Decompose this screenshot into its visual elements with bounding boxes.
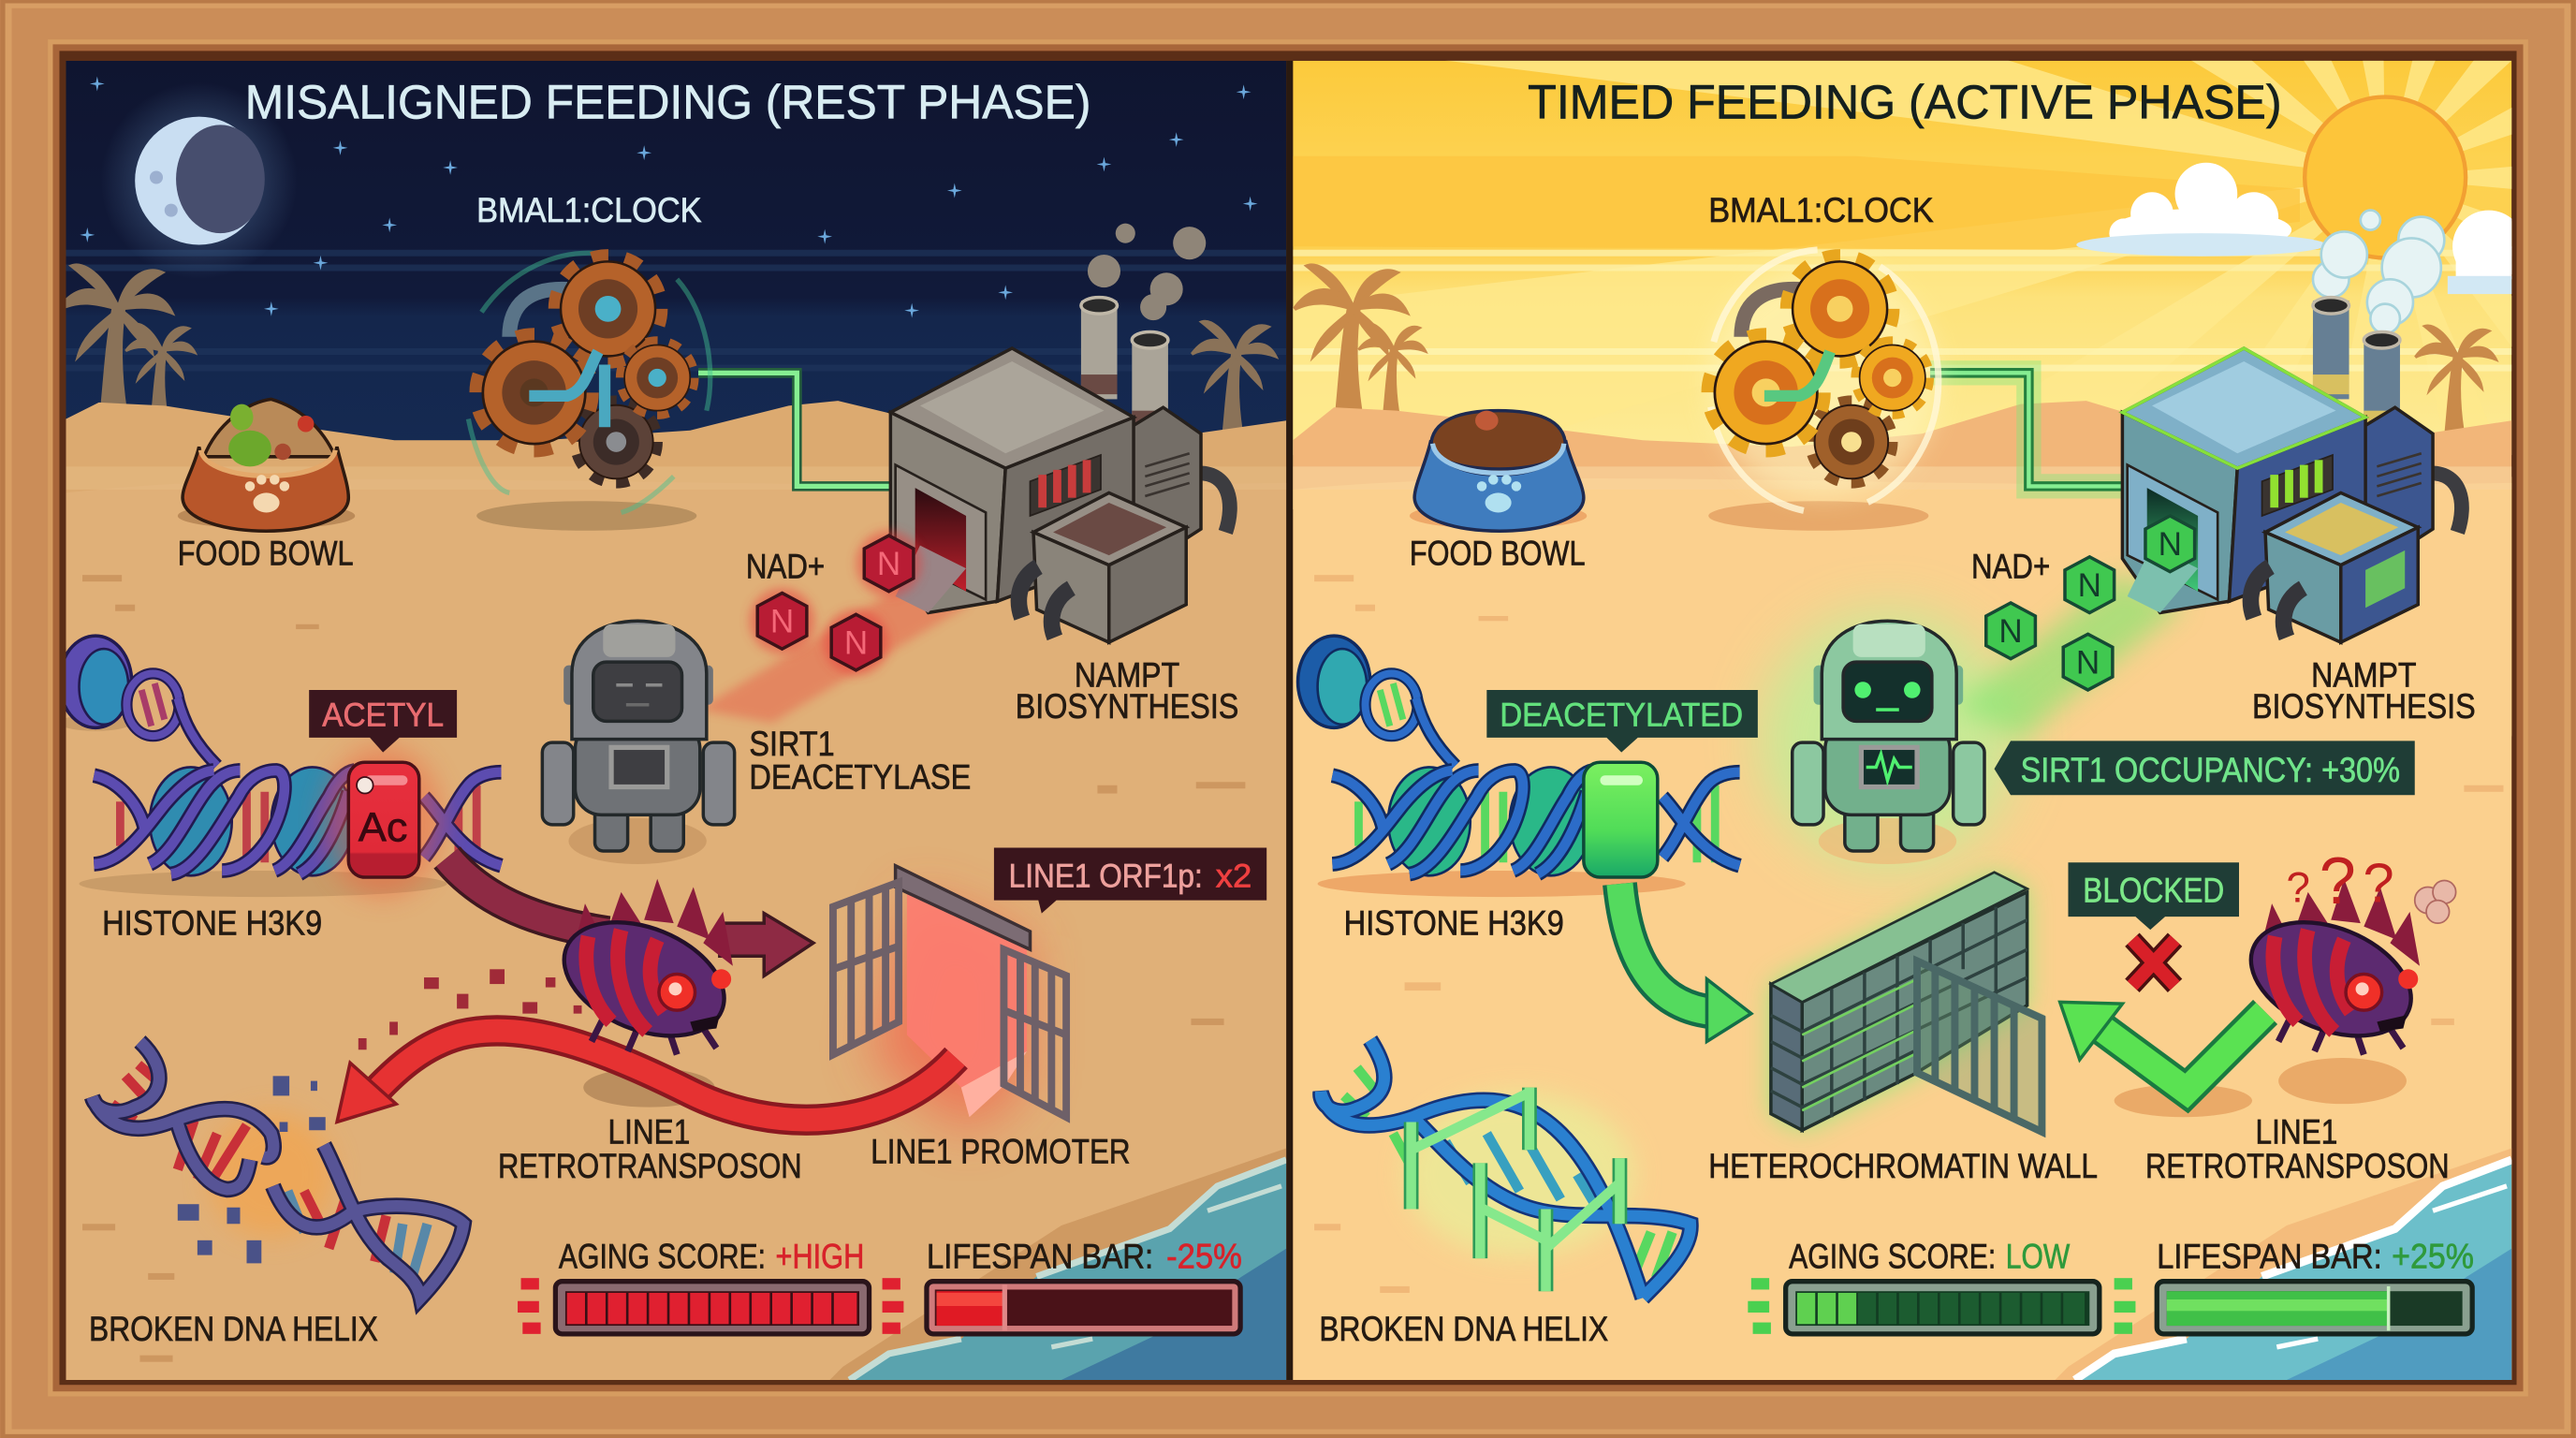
label: NAMPT biosynthesis left: BIOSYNTHESIS bbox=[1016, 687, 1238, 726]
tag: SIRT1 occupancy bbox=[1995, 741, 2415, 795]
tag: BLOCKED: BLOCKED bbox=[2083, 871, 2224, 909]
label: aging score low: AGING SCORE: bbox=[1789, 1238, 1996, 1276]
icon: NAD+ coins, green: N bbox=[2078, 567, 2101, 604]
icon: NAD+ coins, green: N bbox=[2159, 526, 2182, 563]
sea bbox=[829, 1149, 1286, 1380]
gauge: aging score, left bbox=[518, 1278, 903, 1334]
icon: NAMPT factory, blue and green bbox=[2122, 298, 2462, 642]
label: aging score low: LOW bbox=[2006, 1238, 2070, 1276]
label: histone right: HISTONE H3K9 bbox=[1344, 903, 1564, 942]
title: timed feeding: TIMED FEEDING (ACTIVE PHASE) bbox=[1528, 75, 2282, 128]
icon: LINE1 retrotransposon bug, blocked bbox=[2234, 879, 2428, 1058]
arrow: histone to wall bbox=[1619, 884, 1751, 1041]
label: LINE1 retrotransposon right bbox=[2145, 1112, 2450, 1185]
label: NAMPT biosynthesis right bbox=[2252, 655, 2476, 726]
label: lifespan +25%: +25% bbox=[2392, 1238, 2474, 1276]
arrow: LINE1 deflected bbox=[2060, 1002, 2265, 1091]
panel: misaligned feeding (rest phase) bbox=[59, 61, 1286, 1380]
icon: LINE1 promoter open gate bbox=[833, 866, 1066, 1134]
label: lifespan -25%: LIFESPAN BAR: bbox=[927, 1238, 1153, 1276]
clouds bbox=[2076, 163, 2525, 294]
question marks: ? bbox=[2320, 844, 2356, 917]
divider bbox=[1286, 61, 1293, 1380]
label: SIRT1 deacetylase: SIRT1 bbox=[749, 725, 835, 763]
icon: NAD+ coins, green bbox=[1986, 516, 2195, 690]
icon: NAD+ coins, red: N bbox=[770, 604, 794, 640]
label: broken DNA helix right: BROKEN DNA HELIX bbox=[1319, 1310, 1608, 1348]
icon: NAMPT factory, grey bbox=[890, 298, 1230, 642]
icon: crescent moon bbox=[110, 92, 288, 268]
sand bbox=[1293, 401, 2511, 1380]
stars bbox=[80, 77, 1258, 318]
orange sky band bbox=[1293, 156, 2300, 250]
icon: BMAL1:CLOCK gears, rusty bbox=[468, 253, 710, 512]
icon: BMAL1:CLOCK gears, glowing bbox=[1708, 250, 1939, 512]
red debris bbox=[359, 969, 581, 1049]
icon: histone H3K9, acetylated: Ac bbox=[359, 804, 407, 850]
label: food bowl left: FOOD BOWL bbox=[178, 535, 354, 573]
sand patches bbox=[1314, 575, 2503, 1293]
tag: ACETYL bbox=[309, 690, 457, 753]
label: NAD+ left: NAD+ bbox=[746, 548, 825, 586]
label: NAMPT biosynthesis right: NAMPT bbox=[2311, 655, 2416, 694]
sea bbox=[2055, 1149, 2511, 1380]
icon: NAD+ coins, red bbox=[749, 531, 922, 675]
connector line to factory bbox=[698, 373, 896, 486]
tag: LINE1 ORF1p x2: LINE1 ORF1p: bbox=[1009, 858, 1203, 895]
question marks: ? bbox=[2286, 863, 2310, 911]
icon: NAD+ coins, green: N bbox=[2076, 644, 2100, 681]
icon: sun bbox=[2305, 97, 2466, 257]
icon: NAD+ coins, red: N bbox=[877, 546, 900, 582]
connector line to factory bbox=[1930, 373, 2128, 486]
label: NAMPT biosynthesis left: NAMPT bbox=[1075, 655, 1179, 694]
sand bbox=[66, 401, 1286, 1159]
shadow under bug bbox=[583, 1068, 715, 1108]
shadow under gears bbox=[476, 501, 696, 531]
shadow under gears bbox=[1708, 501, 1928, 531]
tag: DEACETYLATED: DEACETYLATED bbox=[1500, 697, 1743, 734]
palm trees bbox=[1295, 266, 2496, 431]
icon: NAD+ coins, green: N bbox=[1998, 613, 2023, 650]
label: aging score high: +HIGH bbox=[776, 1238, 864, 1276]
label: LINE1 retrotransposon left bbox=[498, 1112, 802, 1185]
question marks bbox=[2286, 844, 2394, 917]
shadows under arrow and bug bbox=[2115, 1058, 2407, 1117]
icon: broken DNA helix bbox=[93, 1041, 463, 1298]
label: BMAL1:CLOCK left: BMAL1:CLOCK bbox=[476, 191, 702, 229]
label: aging score high: AGING SCORE: bbox=[559, 1238, 766, 1276]
label: SIRT1 deacetylase: DEACETYLASE bbox=[749, 757, 971, 796]
panel: timed feeding (active phase) bbox=[1293, 0, 2576, 1380]
label: BMAL1:CLOCK right: BMAL1:CLOCK bbox=[1708, 191, 1934, 229]
label: NAMPT biosynthesis right: BIOSYNTHESIS bbox=[2252, 687, 2476, 726]
icon: histone H3K9, acetylated bbox=[59, 636, 501, 897]
icon: SIRT1 robot, grey bbox=[542, 621, 735, 864]
icon: red X bbox=[2132, 940, 2175, 986]
tag: SIRT1 occupancy: SIRT1 OCCUPANCY: +30% bbox=[2021, 751, 2400, 789]
label: LINE1 retrotransposon right: LINE1 bbox=[2256, 1112, 2337, 1151]
robot and NAD+ green glow bbox=[1760, 575, 2185, 867]
label: LINE1 promoter: LINE1 PROMOTER bbox=[871, 1132, 1131, 1170]
question marks: ? bbox=[2364, 851, 2394, 914]
tag: LINE1 ORF1p x2 bbox=[994, 847, 1266, 914]
title: misaligned feeding: MISALIGNED FEEDING (REST PHASE) bbox=[245, 75, 1090, 128]
label: histone left: HISTONE H3K9 bbox=[102, 903, 322, 942]
tag: LINE1 ORF1p x2: x2 bbox=[1216, 858, 1251, 895]
steam bbox=[2313, 211, 2444, 333]
icon: LINE1 retrotransposon bug bbox=[548, 879, 740, 1058]
icon: heterochromatin wall bbox=[1771, 873, 2045, 1134]
gauge: lifespan bar, left bbox=[927, 1282, 1240, 1334]
icon: NAD+ coins, red: N bbox=[844, 624, 868, 661]
night sky bbox=[66, 61, 1286, 455]
label: LINE1 retrotransposon left: RETROTRANSPOSON bbox=[498, 1147, 802, 1185]
icon: puff bbox=[2415, 881, 2456, 923]
label: broken DNA helix left: BROKEN DNA HELIX bbox=[89, 1310, 378, 1348]
sun rays bbox=[1810, 0, 2576, 753]
label: NAD+ right: NAD+ bbox=[1971, 548, 2050, 586]
palm trees bbox=[59, 266, 1276, 431]
NAD+ red beam bbox=[698, 575, 970, 723]
icon: food bowl, orange bbox=[178, 399, 355, 531]
label: LINE1 retrotransposon left: LINE1 bbox=[608, 1112, 690, 1151]
gauge: aging score, right bbox=[1748, 1278, 2135, 1334]
label: lifespan +25%: LIFESPAN BAR: bbox=[2157, 1238, 2382, 1276]
icon: repaired DNA helix bbox=[1321, 1040, 1690, 1298]
label: food bowl right: FOOD BOWL bbox=[1410, 535, 1586, 573]
arrow: histone to promoter bbox=[447, 858, 813, 976]
smoke bbox=[1088, 224, 1206, 320]
gauge: lifespan bar, right bbox=[2157, 1282, 2472, 1334]
label: SIRT1 deacetylase bbox=[749, 725, 971, 796]
sand patches bbox=[82, 575, 1245, 1362]
tag: ACETYL: ACETYL bbox=[322, 697, 444, 734]
icon: SIRT1 robot, green active bbox=[1793, 621, 1984, 864]
label: lifespan -25%: -25% bbox=[1166, 1238, 1242, 1276]
tag: BLOCKED bbox=[2068, 862, 2239, 930]
icon: food bowl, blue bbox=[1410, 411, 1587, 531]
icon: histone H3K9, deacetylated bbox=[1298, 636, 1740, 897]
arrow: promoter to DNA damage bbox=[337, 1031, 957, 1122]
label: NAMPT biosynthesis left bbox=[1016, 655, 1238, 726]
label: LINE1 retrotransposon right: RETROTRANSPOSON bbox=[2145, 1147, 2450, 1185]
tag: DEACETYLATED bbox=[1486, 690, 1758, 753]
label: heterochromatin wall: HETEROCHROMATIN WALL bbox=[1708, 1147, 2098, 1185]
day sky bbox=[1293, 61, 2511, 455]
